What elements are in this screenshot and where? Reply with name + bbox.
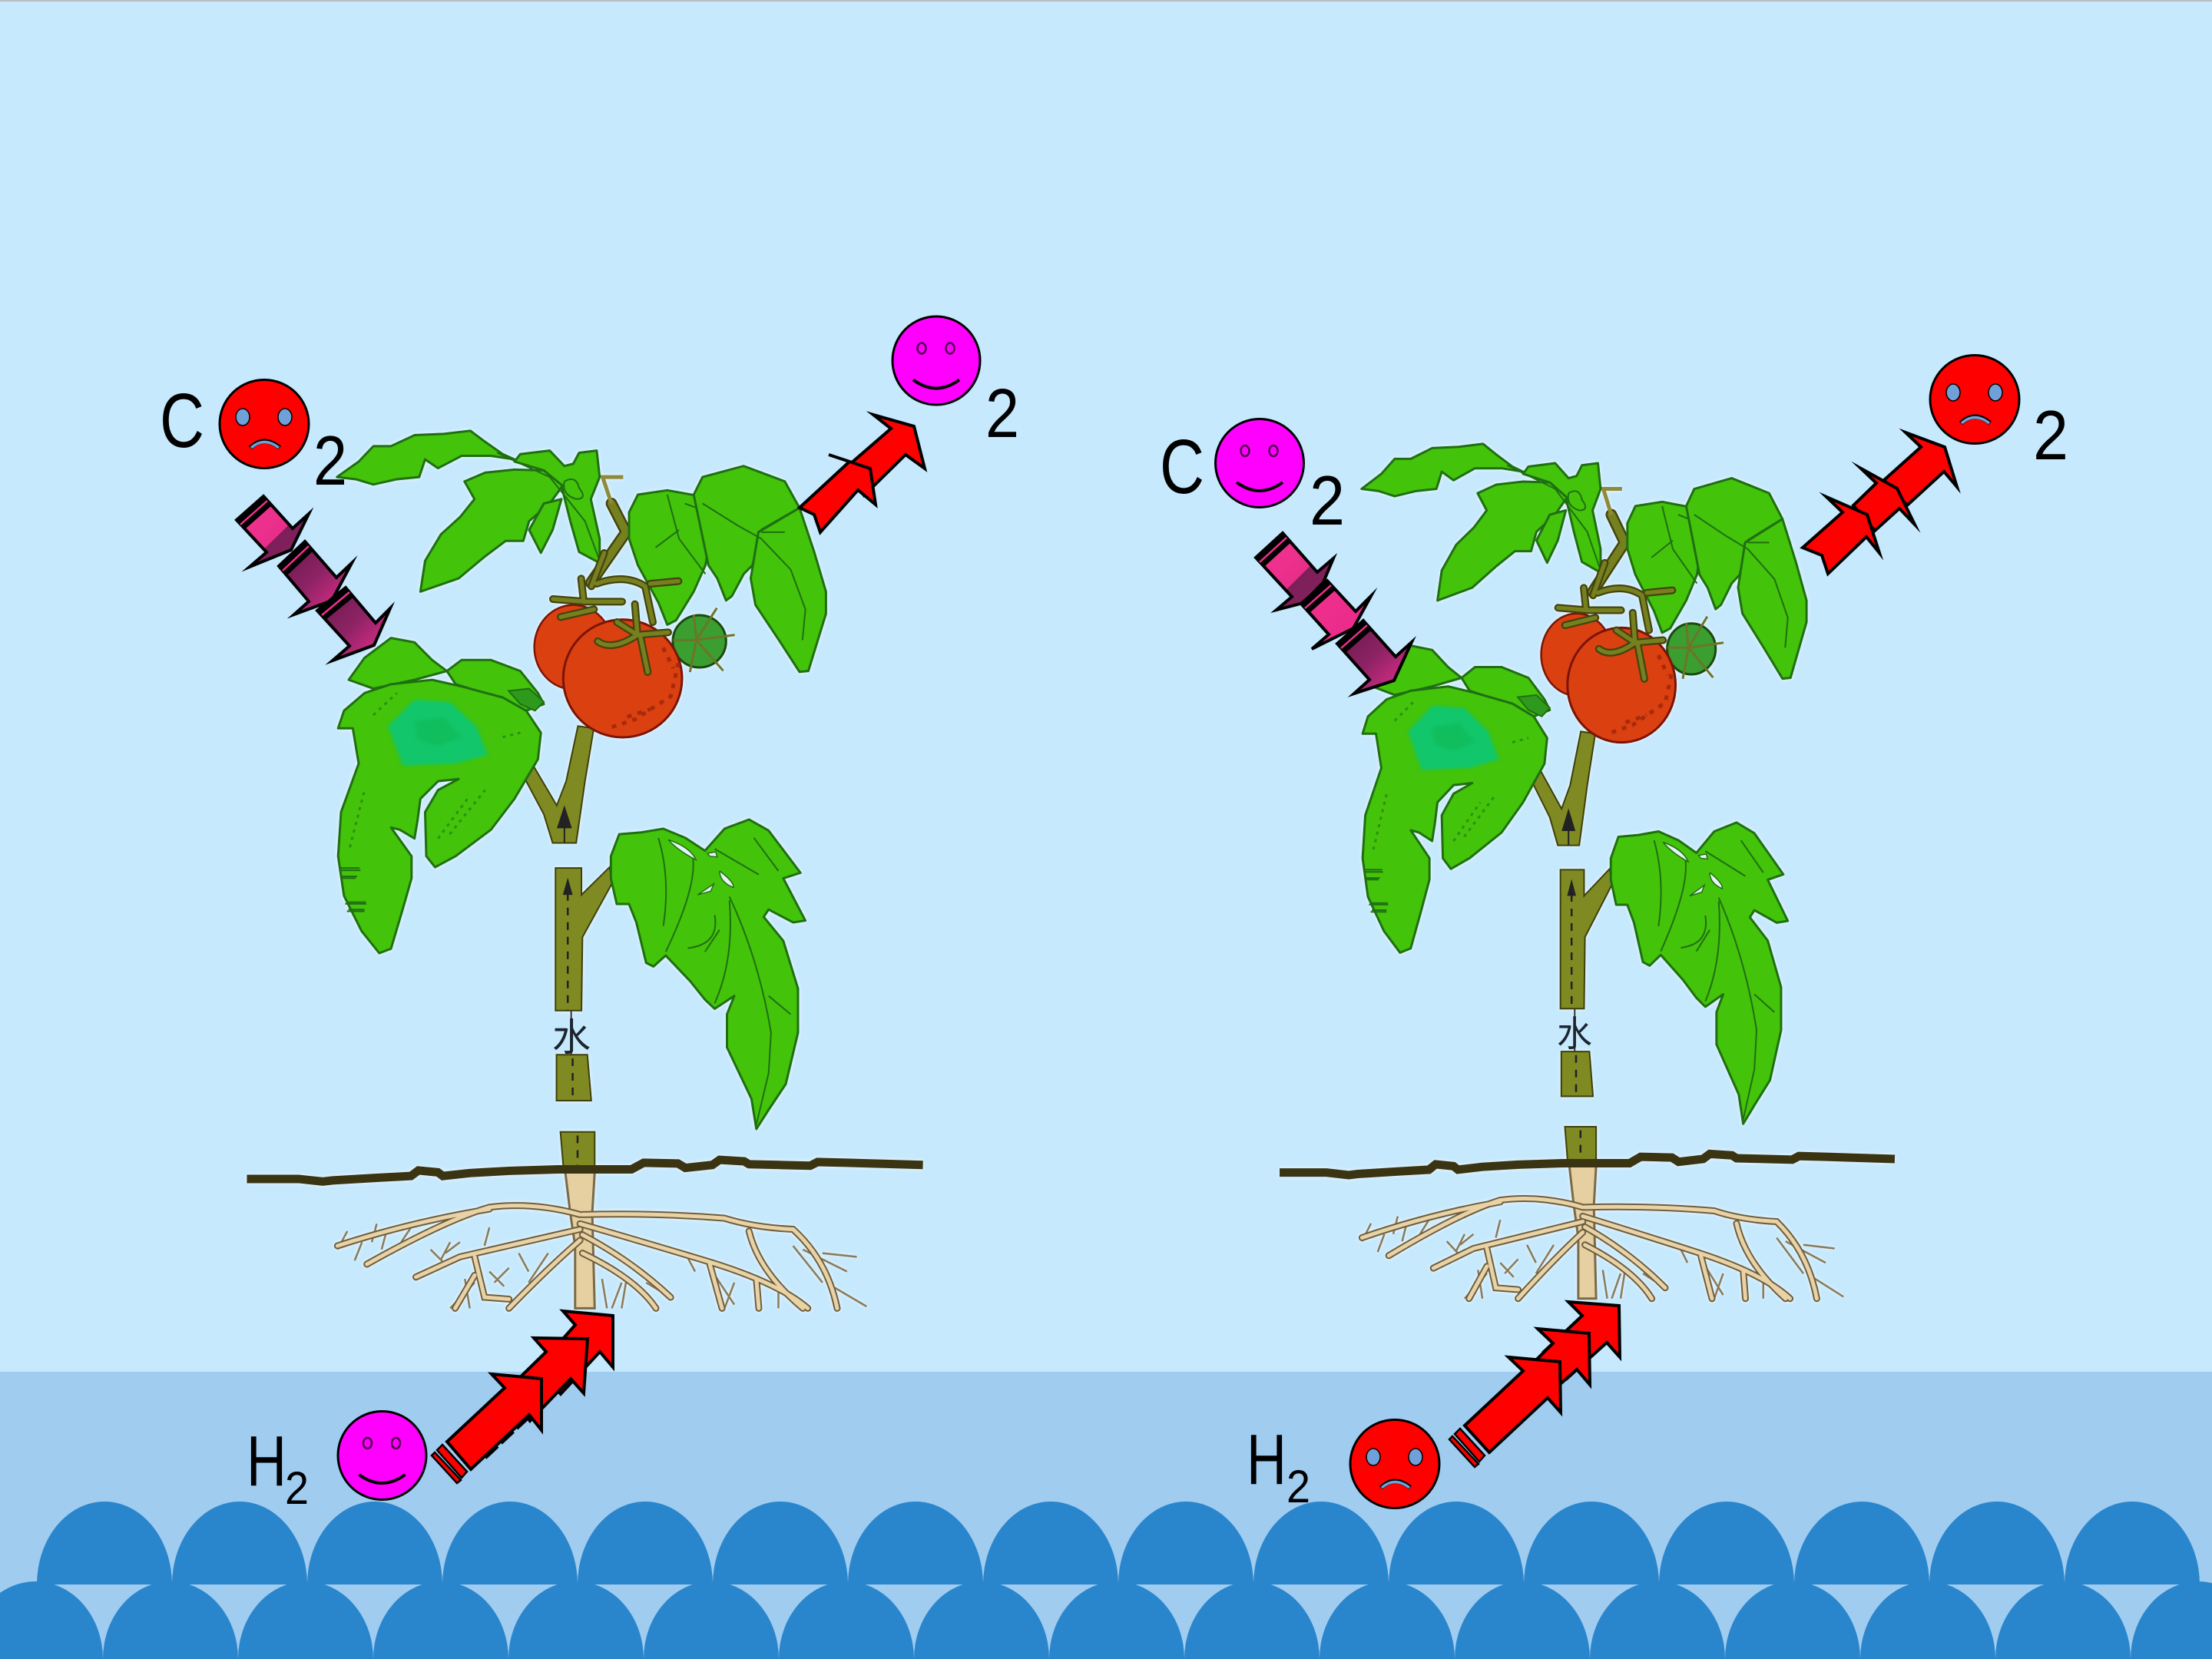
stem section two [557, 1055, 591, 1101]
leaf hatch marks [339, 870, 366, 911]
hatch marks on left leaf [340, 868, 366, 909]
sad red face [1350, 1419, 1439, 1508]
letter H: H [247, 1421, 286, 1501]
soil surface line [247, 1160, 923, 1181]
subscript 2: 2 [285, 1462, 309, 1514]
upper left veins [497, 453, 600, 561]
main stem with side branch [520, 726, 594, 843]
left O2 label [892, 316, 1019, 452]
waves [0, 1502, 2212, 1659]
root hairs [337, 1224, 866, 1308]
tap root [565, 1172, 594, 1308]
tomato fruits [535, 553, 735, 737]
upper right leaf lobe two [694, 466, 800, 601]
tendril [603, 477, 623, 504]
letter C: C [160, 378, 204, 464]
subscript 2: 2 [1286, 1461, 1310, 1512]
leaf speckle [350, 693, 520, 847]
water line [571, 1011, 572, 1055]
arrow: H2O entering left roots [432, 1311, 613, 1483]
left CO2 label [160, 378, 347, 500]
lower left main leaf [338, 680, 541, 953]
left H2O label [247, 1412, 426, 1514]
right tomato plant [1280, 444, 1895, 1299]
tomato stem and calyx [553, 553, 678, 672]
tomato speckle [612, 647, 678, 727]
lower left side leaflet [447, 660, 544, 710]
subscript 2: 2 [985, 376, 1019, 452]
happy magenta face [1215, 419, 1304, 507]
leaf holes [668, 839, 733, 895]
label: water character left: 水 [552, 1016, 591, 1059]
upper curled leaf [515, 451, 600, 563]
front tomato [563, 620, 682, 737]
lower right leaf veins [658, 838, 790, 1124]
upper left leaflet [529, 499, 561, 553]
stem arrow [558, 808, 571, 843]
vessel dashes and arrow [568, 893, 578, 1171]
sad red face [220, 379, 309, 469]
lower wave row [0, 1581, 2212, 1659]
green fruit star [674, 608, 735, 672]
right CO2 label [1160, 419, 1345, 540]
lower right leaf [611, 820, 806, 1129]
arrow: H2O entering right roots [1449, 1302, 1620, 1467]
teal inner patch [415, 717, 462, 746]
stem section three [561, 1132, 594, 1172]
sad red face [1930, 355, 2019, 444]
teal highlighted area [388, 700, 488, 766]
lower plant: stem, leaf, ground and roots [247, 820, 923, 1308]
root outlines [337, 1206, 837, 1308]
upper plant: leaves and stem [337, 431, 826, 953]
upper right leaf lobe three [750, 508, 826, 672]
right H2O label [1247, 1419, 1439, 1512]
root fill [337, 1206, 837, 1308]
letter C: C [1160, 424, 1204, 510]
lower left top leaflet [349, 638, 447, 689]
upper stem [591, 504, 626, 583]
upper right leaf lobe one [629, 490, 711, 624]
arrow: CO2 entering left leaf [237, 496, 390, 661]
upper left leaf [420, 469, 563, 591]
water band [0, 1372, 2212, 1659]
subscript 2: 2 [1310, 462, 1345, 540]
upper wave row [37, 1502, 2200, 1584]
right O2 label [1930, 355, 2068, 475]
tomato stem and calyx shadow [553, 553, 678, 672]
happy magenta face [892, 316, 980, 405]
back tomato [535, 605, 613, 690]
arrow: O2 leaving left plant [800, 415, 925, 532]
arrow: CO2 entering right leaf [1256, 533, 1412, 694]
happy magenta face [338, 1412, 426, 1499]
arrow: O2 leaving right plant [1803, 432, 1957, 574]
top long leaf [337, 431, 515, 485]
stem arrowhead [563, 878, 573, 895]
left tomato plant [247, 431, 923, 1308]
subscript 2: 2 [2033, 397, 2068, 475]
subscript 2: 2 [313, 422, 347, 500]
label: water character right: 水 [1557, 1014, 1592, 1054]
upper right veins [655, 495, 806, 640]
green fruit [673, 615, 726, 667]
letter H: H [1247, 1419, 1286, 1499]
stem section one [555, 867, 613, 1011]
dark folded bit [508, 689, 544, 710]
